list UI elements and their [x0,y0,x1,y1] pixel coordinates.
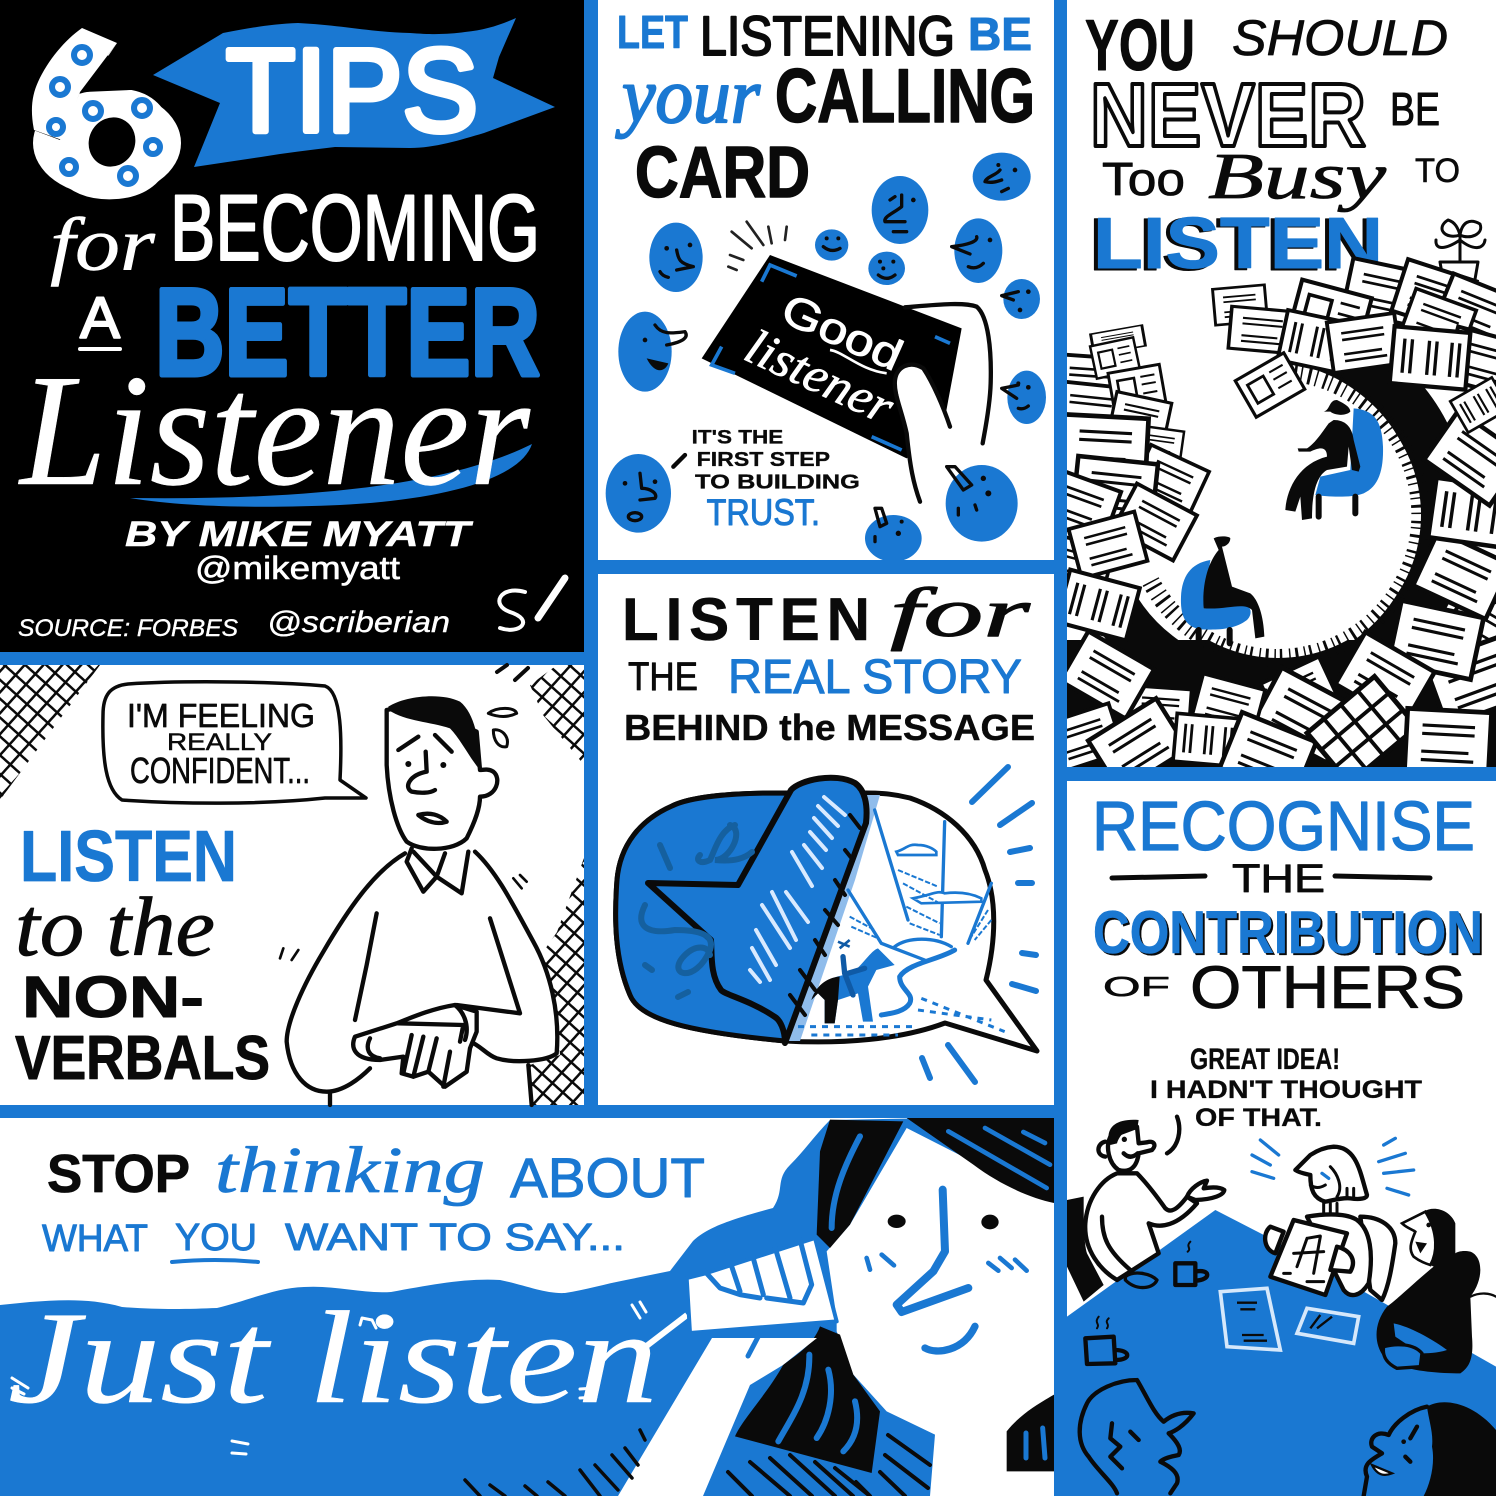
illustration: meeting scene [1067,1117,1496,1496]
subheading: what you want to say: WHAT [42,1218,148,1260]
panel: just listen [0,1118,1054,1496]
speech: great idea [1152,1048,1422,1126]
person: foreground right head [1364,1402,1496,1496]
crosshatch shading [0,665,584,1105]
heading: NON-: NON- [22,965,204,1030]
faded writing on blue [641,825,752,997]
handle: @mikemyatt [195,550,400,586]
collar [407,848,468,893]
illustration: faces and card [606,153,1046,562]
source: SOURCE: FORBES [18,615,238,642]
swoosh underline [130,444,532,507]
arm [618,1338,817,1496]
speech bubble [103,682,366,803]
speech: great idea: I HADN'T THOUGHT [1150,1076,1422,1104]
heading: REAL STORY: REAL STORY [728,651,1022,704]
heading: LET: LET [617,6,688,58]
hands on wrist [353,1005,477,1087]
lettering: just listen: Just listen [8,1284,658,1431]
figure: seated person upper right [1285,400,1383,520]
hatched shadow ring and paper piles [1067,256,1496,767]
peeled corner [648,778,867,1043]
hidden scene: rider in a valley [798,810,1005,1035]
heading: OF: OF [1103,971,1170,1002]
panel: listening calling card [598,0,1054,562]
black business card [702,255,962,458]
speech bubble: I'M FEELING [127,697,315,734]
heading: VERBALS: VERBALS [15,1024,270,1093]
person: woman with document [1252,1138,1414,1300]
heading: CONTRIBUTION [1094,910,1482,956]
heading: BE: BE [968,8,1032,60]
heading: NEVER: NEVER [1090,66,1366,166]
heading: behind the message: BEHIND the MESSAGE [624,707,1035,748]
speech bubble: CONFIDENT... [130,750,310,791]
coffee mugs [1085,1242,1207,1364]
icon: potted plant [1436,220,1485,285]
text: first step: IT'S THE [692,427,783,448]
smile [925,1326,975,1351]
heading: LISTEN: LISTEN [622,586,870,653]
heading: CALLING: CALLING [775,54,1035,139]
speech: great idea: GREAT IDEA! [1190,1043,1340,1076]
hand holding card [895,304,991,502]
face [735,1118,1054,1496]
heading: LISTEN: LISTEN [1093,204,1383,284]
black business card: Good [774,285,910,381]
emphasis sparks around card [728,222,787,270]
paper cup and hand [687,1238,837,1333]
panel: non-verbals [0,665,584,1105]
panel: never too busy [1067,0,1496,767]
subheading: what you want to say: YOU [175,1217,257,1259]
heading: SHOULD: SHOULD [1232,10,1448,66]
byline: BY MIKE MYATT [125,515,473,554]
figure: seated person lower left [1181,536,1264,643]
blue faces crowd [606,153,1046,562]
motion marks [12,1302,646,1454]
papers on table [1220,1288,1359,1350]
person: woman in black [1377,1209,1496,1373]
heading: ABOUT: ABOUT [510,1146,705,1209]
eyes [888,1215,906,1228]
panel: title [0,0,584,652]
lower hair [735,1326,880,1473]
person: foreground left head [1080,1380,1194,1493]
person: man speaking [1067,1117,1224,1302]
heading: your: your [615,52,761,139]
text: first step: TRUST. [707,491,820,533]
speech: great idea: OF THAT. [1195,1104,1322,1132]
nose [897,1190,968,1312]
clothing stripes [728,1435,930,1496]
black business card: listener [737,318,903,435]
heading: BE: BE [1390,83,1440,135]
blue wave and shoulder [0,1118,1054,1496]
illustration: speech bubble peeled open [616,778,1037,1051]
text: first step [673,427,860,533]
heading: YOU: YOU [1085,6,1195,86]
heading: LISTENING: LISTENING [700,4,955,67]
heading: STOP: STOP [47,1144,190,1204]
meeting table [1067,1210,1496,1496]
heading: BECOMING: BECOMING [170,175,540,280]
heading: CARD: CARD [635,133,810,213]
heading: THE: THE [1232,857,1325,901]
subheading: what you want to say [42,1217,625,1262]
sweat drops [488,708,517,747]
emphasis marks [922,767,1036,1082]
credit: @scriberian [267,606,450,639]
head [387,705,497,849]
subheading: what you want to say: WANT TO SAY... [285,1217,625,1259]
heading: A: A [80,286,120,351]
heading: OTHERS: OTHERS [1190,954,1465,1021]
panel: real story [598,574,1054,1105]
figure: nervous man [280,696,557,1105]
heading: Too: Too [1102,153,1185,205]
heading: to the: to the [15,881,215,974]
text: first step: FIRST STEP [697,449,830,471]
heading: Listener: Listener [18,341,531,519]
heading: TIPS: TIPS [226,25,478,157]
banner [153,18,555,167]
panel: recognise others [1067,781,1496,1496]
heading: TO: TO [1415,152,1460,190]
heading: THE: THE [628,655,698,699]
heading: for: for [50,203,155,287]
text: first step: TO BUILDING [695,471,860,493]
heading: thinking: thinking [215,1134,485,1207]
heading: Busy: Busy [1208,140,1387,213]
heading: BETTER: BETTER [155,264,540,402]
heading: LISTEN: LISTEN [20,817,237,897]
speech bubble: REALLY [167,729,272,756]
heading: for: for [890,575,1031,652]
sleeve stripes [465,1430,645,1496]
heading: LISTEN: LISTEN [1089,203,1379,286]
icon: signature with pen [499,578,565,630]
